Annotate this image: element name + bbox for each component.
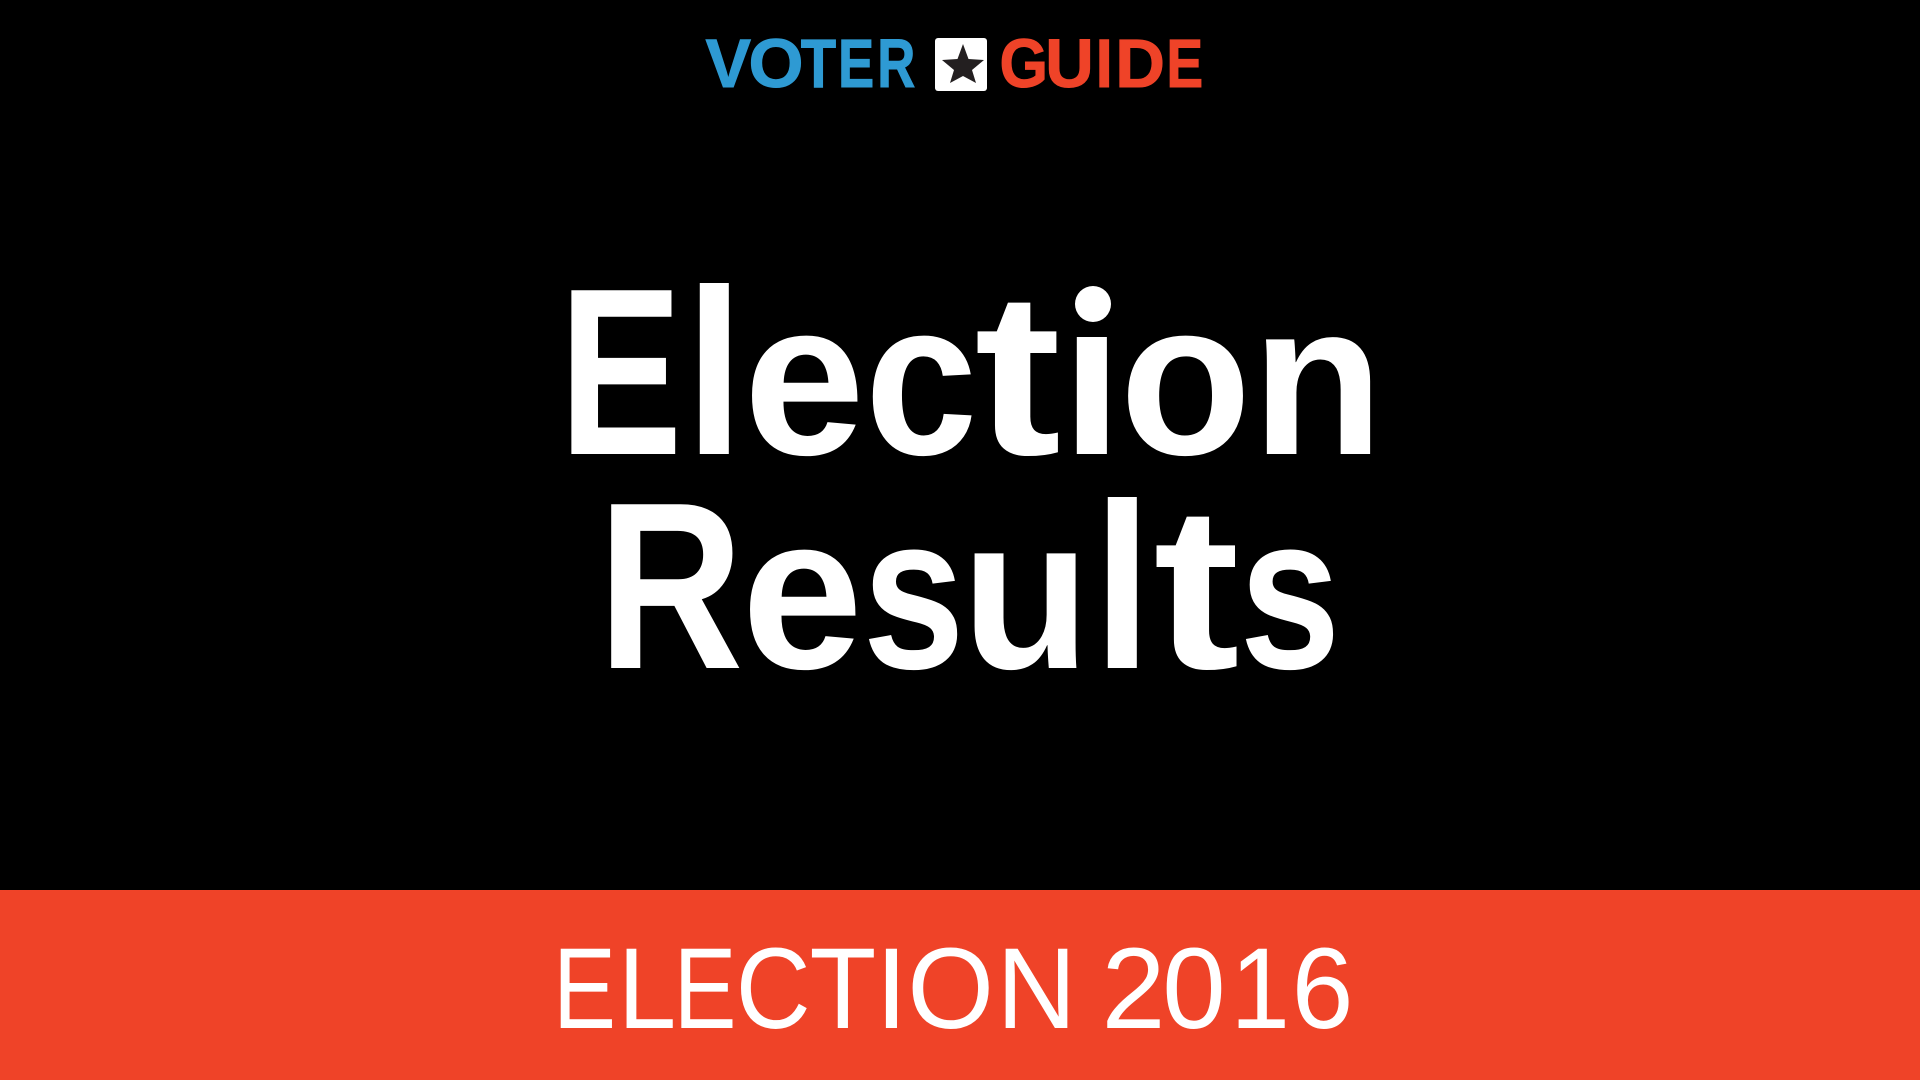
logo word: VOTER: E [838,25,874,102]
title line: Results: u [962,472,1090,714]
footer label: I [875,925,908,1053]
footer label: C [736,925,811,1053]
title line: Election: t [974,245,1061,504]
logo word: GUIDE: U [1045,25,1094,102]
title line: Election: o [1120,255,1251,501]
footer label: E [674,925,736,1053]
footer label: T [810,925,876,1053]
footer label: 0 [1162,925,1226,1053]
icon: star badge [935,38,987,91]
logo word: VOTER: O [748,25,804,102]
footer label: L [618,925,676,1053]
logo word: VOTER: T [801,25,836,102]
title line: Election: l [685,241,744,505]
title line: Election: E [559,240,682,505]
title: Election Results [559,240,1384,719]
footer label: 6 [1292,925,1353,1053]
title line: Election: c [865,255,978,501]
title line: Election: n [1252,258,1384,500]
title line: Results: R [598,454,744,719]
title line: Election: i [1062,241,1122,504]
title line: Results: e [742,469,863,715]
footer label: E [553,925,616,1053]
logo word: VOTER: V [706,25,751,102]
logo word: GUIDE: D [1115,25,1165,102]
footer band: Election 2016 [0,890,1920,1080]
title line: Election: e [744,255,865,501]
title line: Results: s [862,469,965,715]
title line: Results: t [1153,459,1240,718]
logo: Voter Guide [706,25,1203,102]
title line: Results: s [1240,469,1340,715]
logo word: VOTER: R [877,25,915,102]
title line: Results: l [1093,455,1152,719]
footer label: N [997,925,1076,1053]
logo word: GUIDE: I [1096,25,1113,102]
footer label: 1 [1230,925,1290,1053]
footer label: 2 [1102,925,1166,1053]
logo word: GUIDE: G [1000,25,1048,102]
footer label: O [907,925,994,1053]
logo word: GUIDE: E [1166,25,1203,102]
round dot of the letter i [1068,275,1116,337]
